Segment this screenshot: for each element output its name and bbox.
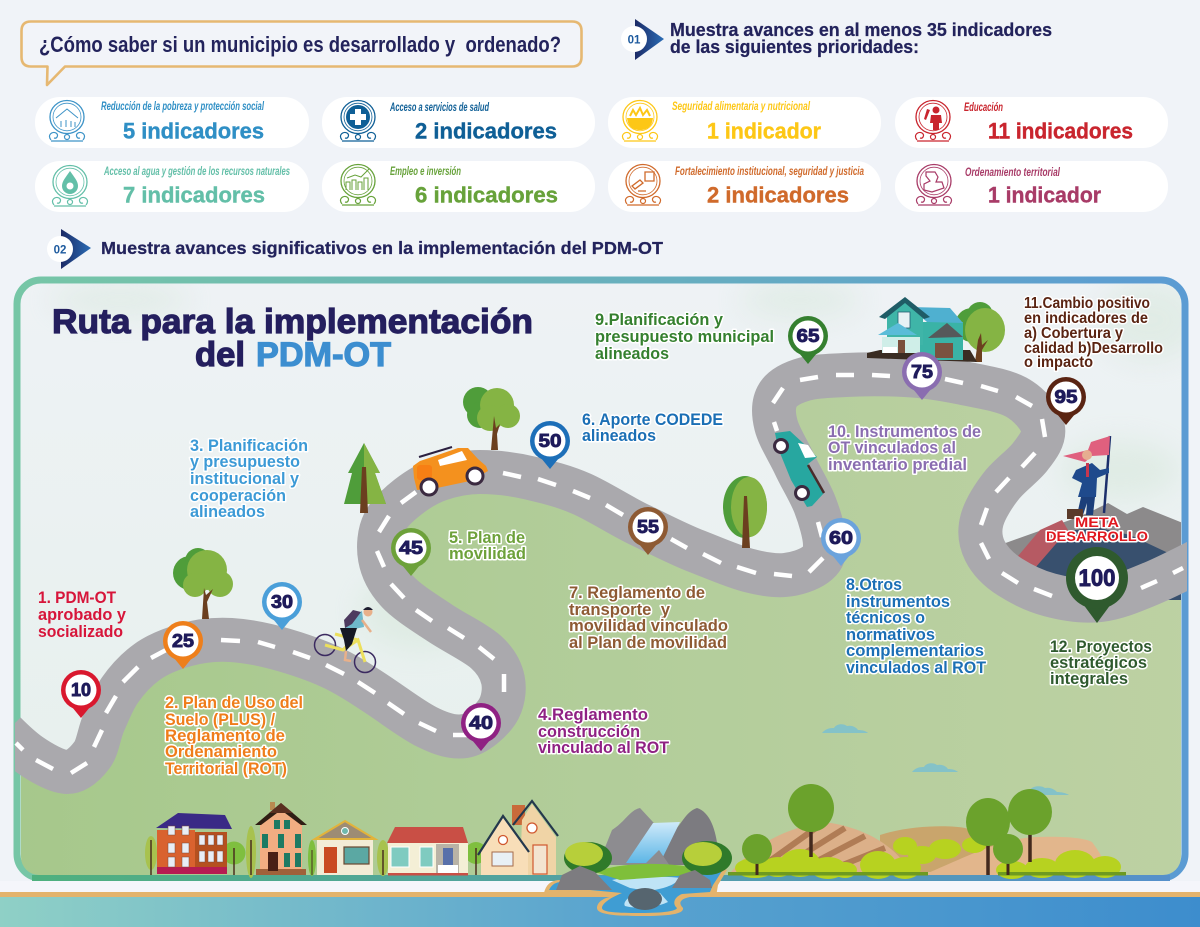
label 8 <box>846 576 986 677</box>
label 8: 8.Otros <box>846 576 902 594</box>
label 9: 9.Planificación y <box>595 311 724 329</box>
heading: requirement 01: de las siguientes prioridades: <box>670 36 919 57</box>
card: pobreza: Reducción de la pobreza y protección social <box>101 99 264 113</box>
heading: requirement 01 <box>670 19 1052 57</box>
card: ordenamiento territorial <box>895 161 1168 212</box>
card: fortalecimiento institucional: Fortalecimiento institucional, seguridad y justicia <box>675 164 864 178</box>
label 12: 12. Proyectos <box>1050 638 1152 656</box>
title: Ruta para la implementación <box>52 303 533 341</box>
card: seguridad alimentaria <box>608 97 881 148</box>
label 12: integrales <box>1050 670 1128 688</box>
label 11: a) Cobertura y <box>1024 325 1123 342</box>
card: ordenamiento territorial: Ordenamiento territorial <box>965 165 1060 179</box>
label 8: técnicos o <box>846 609 925 627</box>
callout: main question: ¿Cómo saber si un municipio es desarrollado y ordenado? <box>39 32 561 57</box>
label 11: calidad b)Desarrollo <box>1024 340 1163 357</box>
heading: requirement 02: Muestra avances significativos en la implementación del PDM-OT <box>101 238 663 258</box>
tree near 25 <box>173 548 233 619</box>
label 1: socializado <box>38 623 123 641</box>
card: salud <box>322 97 595 148</box>
label 8: normativos <box>846 626 935 644</box>
card: salud: Acceso a servicios de salud <box>389 100 489 114</box>
tree near 55 <box>723 476 767 548</box>
label 1: 1. PDM-OT <box>38 589 116 607</box>
pin 50 <box>530 421 570 469</box>
tree near 50 <box>463 387 520 450</box>
scene: house 5 <box>478 801 558 875</box>
label 9: presupuesto municipal <box>595 328 774 346</box>
title: del <box>195 336 245 374</box>
section marker 01 <box>621 19 664 60</box>
card: fortalecimiento institucional: 2 indicadores <box>707 182 849 208</box>
card: fortalecimiento institucional <box>608 161 881 212</box>
pin 60: 60 <box>829 528 853 548</box>
pin 40: 40 <box>469 713 493 733</box>
label 11: 11.Cambio positivo <box>1024 295 1150 312</box>
label 12 <box>1050 638 1152 688</box>
label 10 <box>828 423 981 474</box>
card: ordenamiento territorial: 1 indicador <box>988 182 1101 208</box>
pin 30 <box>262 582 302 630</box>
waterfall scene <box>544 808 732 916</box>
orange car <box>413 447 488 495</box>
title: PDM-OT <box>256 336 391 374</box>
teal house <box>867 297 977 362</box>
label 7: transporte y <box>569 601 671 619</box>
mountain <box>1000 503 1183 600</box>
clouds <box>822 724 1069 795</box>
bottom panel edge <box>32 875 1170 881</box>
water band <box>0 897 1200 927</box>
label 2: 2. Plan de Uso del <box>165 694 303 712</box>
meta label: DESARROLLO <box>1046 529 1148 544</box>
teal car <box>774 431 824 507</box>
card: agua: Acceso al agua y gestión de los recursos naturales <box>103 164 290 178</box>
label 11: en indicadores de <box>1024 310 1148 327</box>
scene: bushes <box>728 837 1126 879</box>
label 6: 6. Aporte CODEDE <box>582 411 723 429</box>
pin 25 <box>163 621 203 669</box>
pin 65: 65 <box>797 326 819 346</box>
label 4: vinculado al ROT <box>538 739 669 757</box>
card: pobreza <box>35 97 309 148</box>
section marker 02 <box>47 229 91 269</box>
label 2: Suelo (PLUS) / <box>165 711 275 729</box>
label 11: o impacto <box>1024 354 1093 371</box>
label 3: 3. Planificación <box>190 437 308 455</box>
label 10: OT vinculados al <box>828 439 956 457</box>
label 3 <box>190 437 308 521</box>
pin 45 <box>391 528 431 576</box>
card: educación: 11 indicadores <box>988 118 1133 144</box>
label 5: movilidad <box>449 545 526 563</box>
label 10: inventario predial <box>828 456 967 474</box>
heading: requirement 01: Muestra avances en al menos 35 indicadores <box>670 19 1052 40</box>
label 3: alineados <box>190 503 265 521</box>
label 4: 4.Reglamento <box>538 706 648 724</box>
label 1 <box>38 589 127 641</box>
label 2: Reglamento de <box>165 727 285 745</box>
label 10: 10. Instrumentos de <box>828 423 981 441</box>
pin 60 <box>821 518 861 566</box>
label 2: Territorial (ROT) <box>165 760 287 778</box>
label 8: vinculados al ROT <box>846 659 986 677</box>
pin 95 <box>1046 377 1086 425</box>
green land <box>21 396 1181 875</box>
section marker 01: 01 <box>628 34 641 46</box>
pin 95: 95 <box>1055 387 1077 407</box>
road lane dashes <box>16 375 1183 773</box>
label 7: 7. Reglamento de <box>569 584 705 602</box>
cyclist <box>314 607 376 672</box>
pin 55 <box>628 507 668 555</box>
pin 10: 10 <box>71 680 91 700</box>
panel: route map <box>0 280 1200 900</box>
section marker 02: 02 <box>54 244 66 256</box>
label 1: aprobado y <box>38 606 127 624</box>
card: empleo: Empleo e inversión <box>390 164 461 178</box>
label 3: institucional y <box>190 470 300 488</box>
background watercolor patches <box>50 280 1200 650</box>
scene: house 2 <box>255 802 307 875</box>
pin 75 <box>902 352 942 400</box>
label 7: movilidad vinculado <box>569 617 728 635</box>
scene: house 1 <box>156 813 232 874</box>
pin 75: 75 <box>911 362 933 382</box>
card: agua <box>35 161 309 212</box>
label 4: construcción <box>538 723 640 741</box>
pin 100 <box>1066 547 1128 623</box>
panel background <box>17 280 1185 878</box>
pin 30: 30 <box>271 592 293 612</box>
scene: house 3 <box>315 821 375 875</box>
title <box>52 303 533 374</box>
meta label: META <box>1075 515 1119 530</box>
callout: main question <box>22 22 582 85</box>
scene: row of small trees <box>145 826 487 878</box>
tan shoreline <box>0 892 1200 897</box>
road <box>5 374 1200 772</box>
label 9: alineados <box>595 345 669 363</box>
label 7: al Plan de movilidad <box>569 634 727 652</box>
pin 65 <box>788 316 828 364</box>
pine tree <box>344 443 386 513</box>
card: empleo <box>322 161 595 212</box>
pin 10 <box>61 670 101 718</box>
label 2 <box>165 694 303 778</box>
label 3: y presupuesto <box>190 453 300 471</box>
label 8: complementarios <box>846 642 984 660</box>
pin 45: 45 <box>399 538 423 558</box>
label 6: alineados <box>582 427 656 445</box>
label 8: instrumentos <box>846 593 950 611</box>
label 9 <box>595 311 774 363</box>
pin 55: 55 <box>637 517 659 537</box>
card: educación: Educación <box>964 100 1003 114</box>
card: empleo: 6 indicadores <box>415 182 558 208</box>
label 2: Ordenamiento <box>165 743 277 761</box>
goal figure with flag <box>1063 436 1110 519</box>
strip below panel <box>0 881 1200 892</box>
label 7 <box>569 584 728 652</box>
label 6 <box>582 411 723 445</box>
card: seguridad alimentaria: Seguridad alimentaria y nutricional <box>672 99 810 113</box>
label 11 <box>1024 295 1163 371</box>
card: agua: 7 indicadores <box>123 182 265 208</box>
card: seguridad alimentaria: 1 indicador <box>707 118 821 144</box>
meta label <box>1046 515 1148 544</box>
card: salud: 2 indicadores <box>415 118 557 144</box>
label 5: 5. Plan de <box>449 529 525 547</box>
pin 100: 100 <box>1078 565 1116 592</box>
label 5 <box>449 529 526 563</box>
scene: trees <box>742 784 1052 875</box>
scene: farmland hills <box>731 823 1108 875</box>
label 12: estratégicos <box>1050 654 1147 672</box>
pin 50: 50 <box>539 431 561 451</box>
pin 40 <box>461 703 501 751</box>
pin 25: 25 <box>172 631 194 651</box>
card: pobreza: 5 indicadores <box>123 118 264 144</box>
tree near house <box>955 302 1005 362</box>
scene: house 4 <box>387 827 468 876</box>
card: educación <box>895 97 1168 148</box>
label 3: cooperación <box>190 487 286 505</box>
label 4 <box>538 706 669 757</box>
